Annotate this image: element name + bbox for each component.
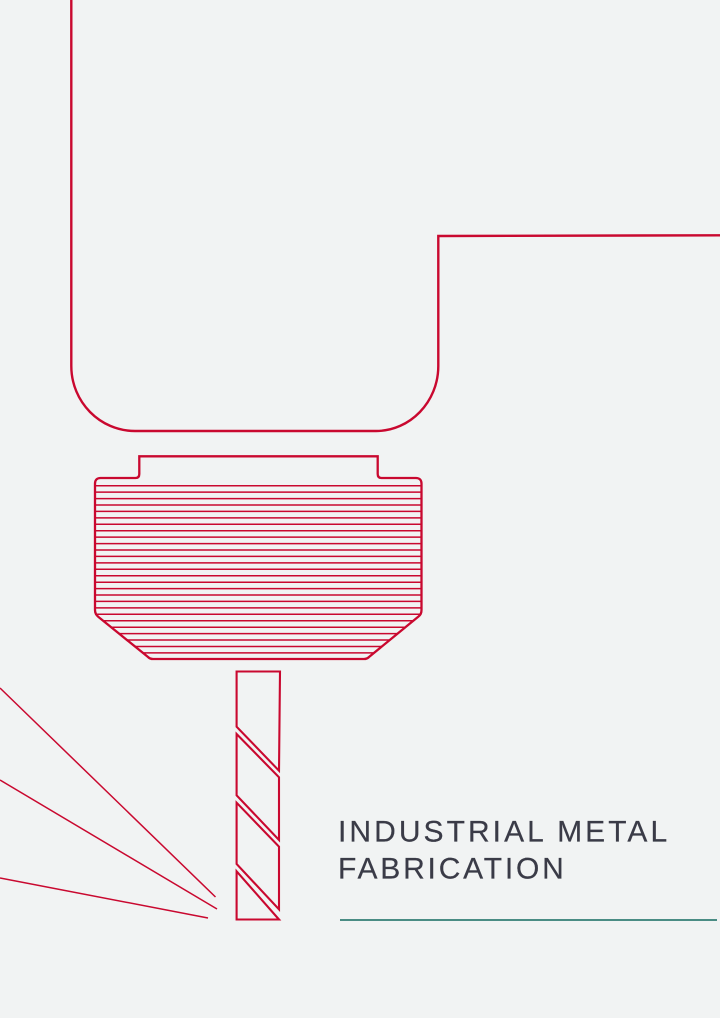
title underline [340, 919, 717, 921]
tool segment 2 [237, 734, 279, 840]
tool segment 4 [237, 871, 279, 920]
spark lines [0, 688, 217, 918]
tool segment 3 [237, 803, 279, 909]
title: FABRICATION [338, 852, 567, 885]
spark line middle [0, 780, 217, 909]
tool holder with hatching [95, 456, 422, 659]
tool segment 1 [237, 672, 280, 771]
machine spindle body outline [71, 0, 720, 431]
spark line top [0, 688, 216, 897]
holder hatch lines [95, 486, 422, 653]
end mill cutting tool [237, 672, 280, 920]
holder outline [95, 456, 422, 659]
spark line bottom [0, 878, 208, 918]
title: INDUSTRIAL METAL [338, 816, 670, 849]
